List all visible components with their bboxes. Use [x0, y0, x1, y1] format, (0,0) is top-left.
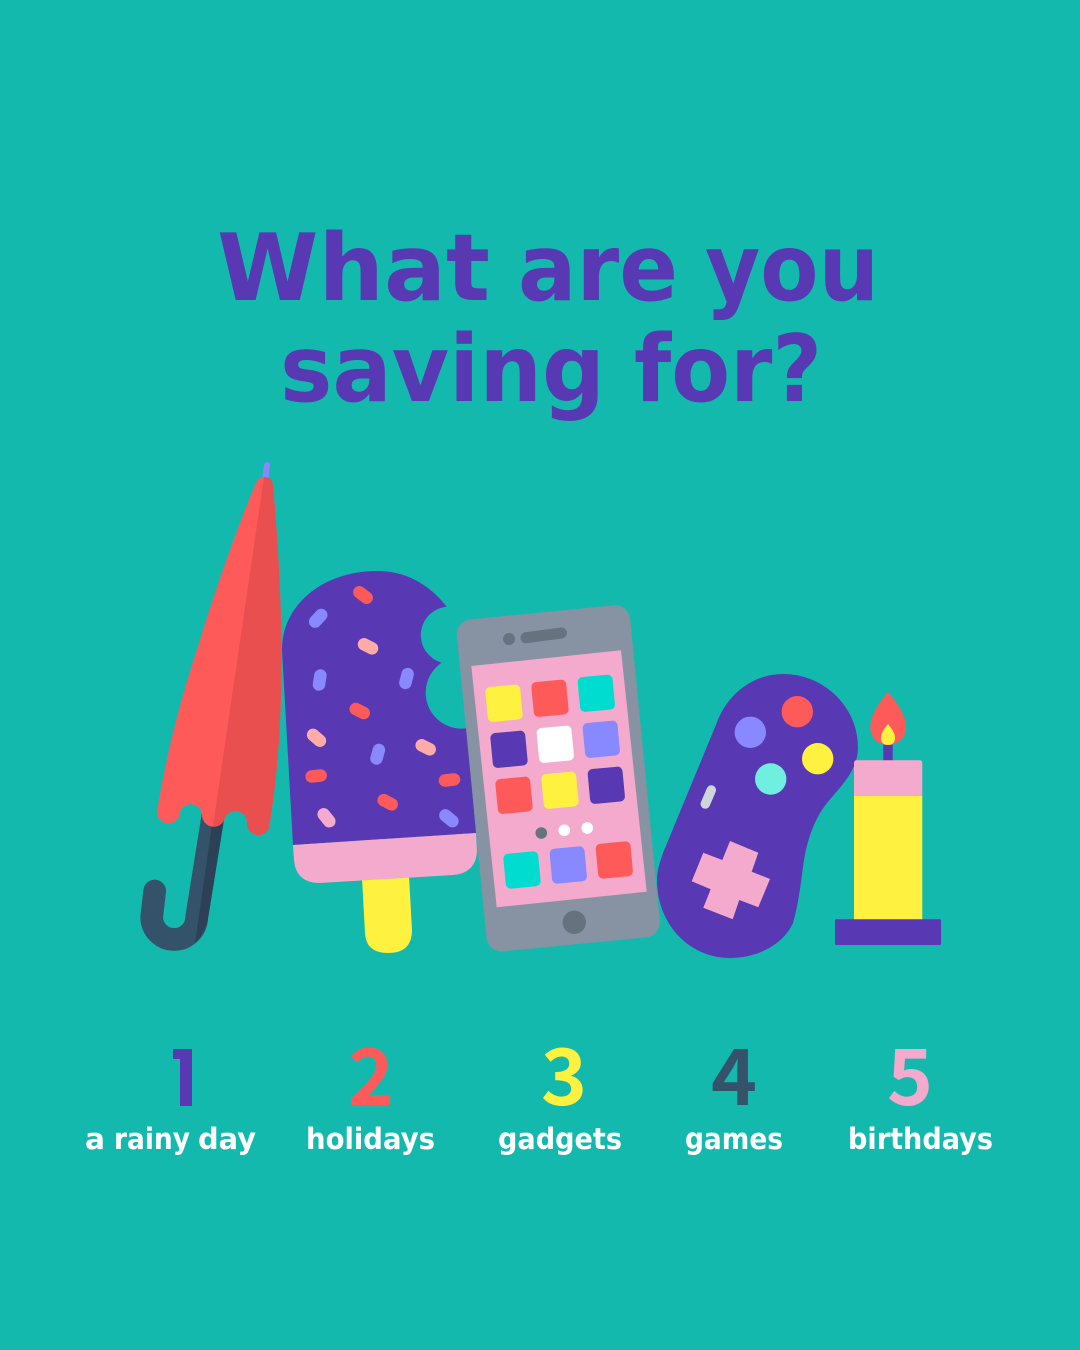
icon: candle	[835, 692, 941, 945]
ranking item 4: 4	[711, 1016, 757, 1128]
ranking item 1: 1	[164, 1016, 210, 1128]
ranking item 1: rainy	[114, 1122, 190, 1156]
ranking item 2: 2	[348, 1016, 394, 1128]
title: saving	[280, 315, 605, 423]
sprinkles	[312, 592, 454, 821]
ranking item 3	[498, 1016, 622, 1156]
icon: smartphone	[455, 604, 661, 953]
title: for?	[634, 315, 822, 423]
ranking item 1: day	[198, 1122, 256, 1156]
icon: popsicle	[282, 571, 477, 953]
title: What	[217, 214, 490, 322]
ranking item 5: birthdays	[848, 1122, 993, 1156]
ranking item 2: holidays	[306, 1122, 435, 1156]
ranking item 3: 3	[541, 1016, 587, 1128]
ranking item 3: gadgets	[498, 1122, 622, 1156]
app icons	[485, 674, 633, 889]
ranking item 1	[86, 1049, 256, 1155]
title: you	[705, 214, 879, 322]
title	[217, 214, 879, 423]
ranking item 2	[306, 1016, 435, 1156]
title: are	[518, 214, 678, 322]
icon: umbrella	[152, 465, 282, 943]
ranking item 1: a	[85, 1122, 105, 1156]
ranking item 5: 5	[887, 1016, 933, 1128]
icon: gamepad	[657, 674, 858, 958]
ranking item 4	[685, 1016, 783, 1156]
ranking item 4: games	[685, 1122, 783, 1156]
ranking item 5	[848, 1016, 993, 1156]
